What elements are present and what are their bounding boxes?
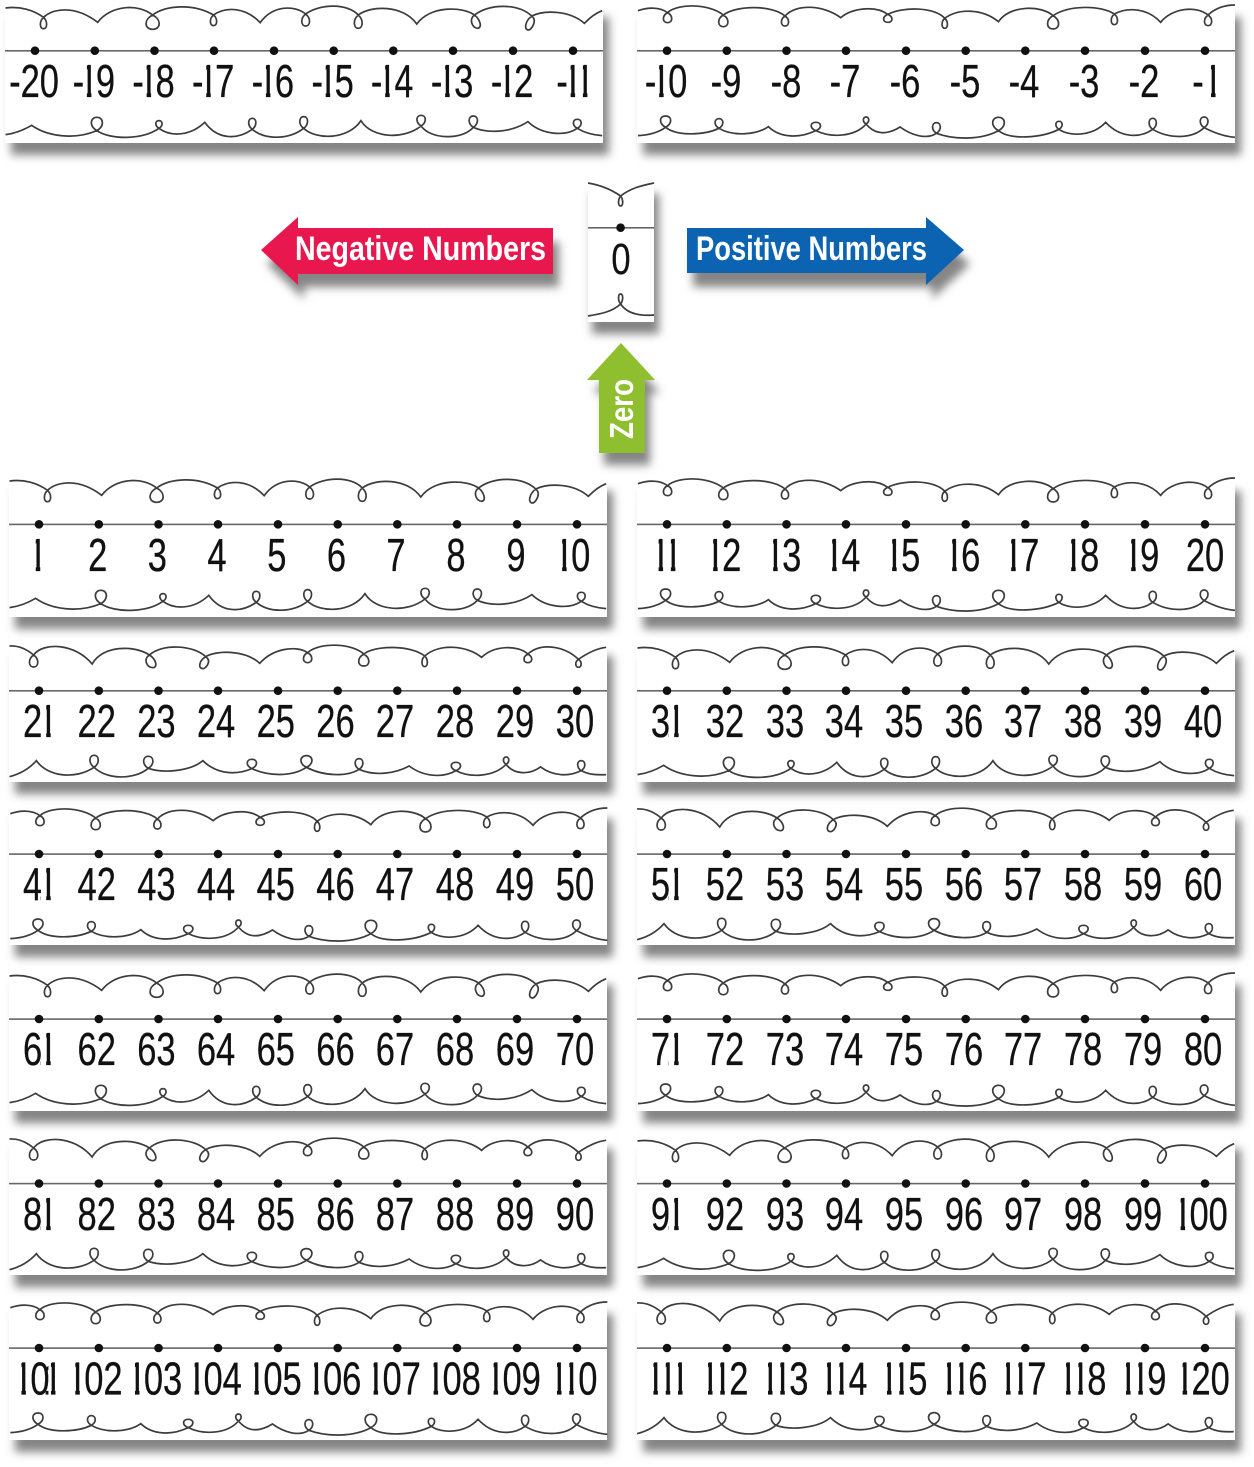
strip: -10 to -1: -8 (771, 55, 801, 107)
label: positive numbers: Positive Numbers (696, 230, 927, 268)
strip: 21 to 30: 25 (257, 695, 295, 747)
strip: 111 to 120: 111 (646, 1353, 689, 1405)
strip: 1 to 10: 7 (386, 529, 406, 581)
strip: -20 to -11 (5, 5, 603, 143)
strip: 21 to 30: 21 (23, 695, 57, 747)
strip: 61 to 70: 66 (316, 1023, 355, 1075)
strip: 71 to 80: 77 (1004, 1023, 1042, 1075)
strip: 101 to 110 (9, 1302, 607, 1440)
strip: 81 to 90: 81 (23, 1188, 57, 1240)
strip: 61 to 70: 63 (137, 1023, 176, 1075)
strip: 11 to 20: 17 (1003, 529, 1039, 581)
strip: 71 to 80: 75 (885, 1023, 923, 1075)
strip: 21 to 30: 28 (436, 695, 474, 747)
strip: 41 to 50: 48 (436, 858, 474, 910)
strip: -20 to -11: -17 (192, 55, 234, 107)
strip: 91 to 100: 92 (706, 1188, 744, 1240)
strip: 101 to 110: 101 (14, 1353, 62, 1405)
strip: 71 to 80: 79 (1124, 1023, 1162, 1075)
arrow: zero (587, 343, 655, 453)
strip: 61 to 70: 68 (436, 1023, 474, 1075)
strip: -20 to -11: -16 (252, 55, 294, 107)
strip: 111 to 120: 119 (1118, 1353, 1166, 1405)
strip: -20 to -11: -19 (73, 55, 115, 107)
strip: 1 to 10: 3 (148, 529, 167, 581)
strip: 41 to 50: 45 (257, 858, 295, 910)
zero card line (588, 227, 654, 229)
label: zero: Zero (603, 379, 640, 439)
strip: -10 to -1: -2 (1129, 55, 1159, 107)
strip: -10 to -1: -5 (950, 55, 980, 107)
label: negative numbers: Negative Numbers (295, 230, 546, 268)
strip: 101 to 110: 106 (306, 1353, 361, 1405)
strip: 41 to 50: 46 (316, 858, 355, 910)
strip: 31 to 40: 32 (706, 695, 744, 747)
strip: 11 to 20: 16 (944, 529, 980, 581)
strip: 111 to 120: 118 (1058, 1353, 1106, 1405)
strip: 81 to 90: 85 (257, 1188, 295, 1240)
strip: 41 to 50: 49 (496, 858, 534, 910)
strip: 71 to 80: 76 (945, 1023, 983, 1075)
strip: 91 to 100: 97 (1004, 1188, 1042, 1240)
strip: 1 to 10: 1 (28, 529, 47, 581)
strip: 101 to 110: 108 (426, 1353, 481, 1405)
strip: 41 to 50 (9, 807, 607, 945)
strip: 91 to 100: 98 (1064, 1188, 1102, 1240)
strip: 41 to 50: 50 (556, 858, 594, 910)
number 0: 0 (611, 235, 631, 284)
strip: -20 to -11: -12 (491, 55, 533, 107)
strip: 61 to 70: 62 (78, 1023, 116, 1075)
strip: 1 to 10: 2 (88, 529, 107, 581)
strip: 61 to 70: 67 (376, 1023, 414, 1075)
strip: 1 to 10: 9 (506, 529, 526, 581)
strip: 21 to 30: 30 (556, 695, 594, 747)
strip: 11 to 20: 20 (1186, 529, 1224, 581)
strip: 91 to 100: 91 (651, 1188, 685, 1240)
strip: 31 to 40: 36 (945, 695, 983, 747)
strip: 111 to 120 (637, 1302, 1235, 1440)
strip: 51 to 60 (637, 807, 1235, 945)
strip: 11 to 20: 15 (884, 529, 920, 581)
strip: 91 to 100: 99 (1124, 1188, 1162, 1240)
strip: 1 to 10: 10 (554, 529, 590, 581)
strip: 81 to 90: 82 (78, 1188, 116, 1240)
strip: -10 to -1: -1 (1192, 55, 1222, 107)
strip: 61 to 70: 64 (197, 1023, 235, 1075)
strip: 21 to 30: 22 (78, 695, 116, 747)
strip: 111 to 120: 113 (760, 1353, 808, 1405)
strip: 101 to 110: 103 (127, 1353, 182, 1405)
strip: -10 to -1 (637, 5, 1235, 143)
strip: -10 to -1: -10 (645, 55, 687, 107)
strip: 11 to 20: 13 (765, 529, 801, 581)
strip: 31 to 40: 34 (825, 695, 863, 747)
strip: 51 to 60: 57 (1004, 858, 1042, 910)
strip: 11 to 20: 19 (1123, 529, 1159, 581)
strip: 51 to 60: 53 (766, 858, 804, 910)
strip: 41 to 50: 42 (78, 858, 116, 910)
strip: 21 to 30: 24 (197, 695, 235, 747)
strip: -10 to -1: -9 (711, 55, 741, 107)
strip: 61 to 70: 69 (496, 1023, 534, 1075)
strip: 81 to 90: 88 (436, 1188, 474, 1240)
strip: 91 to 100 (637, 1137, 1235, 1275)
strip: 111 to 120: 116 (939, 1353, 987, 1405)
strip: 31 to 40 (637, 644, 1235, 782)
strip: 1 to 10 (9, 479, 607, 617)
strip: 31 to 40: 33 (766, 695, 804, 747)
strip: 101 to 110: 110 (549, 1353, 597, 1405)
strip: 91 to 100: 100 (1173, 1188, 1228, 1240)
strip: -10 to -1: -3 (1069, 55, 1099, 107)
strip: 51 to 60: 60 (1184, 858, 1222, 910)
strip: 61 to 70: 70 (556, 1023, 594, 1075)
strip: 81 to 90: 84 (197, 1188, 235, 1240)
strip: 81 to 90: 86 (316, 1188, 355, 1240)
strip: 101 to 110: 105 (247, 1353, 302, 1405)
strip: 11 to 20 (637, 478, 1235, 617)
strip: -20 to -11: -20 (9, 55, 59, 107)
strip: 91 to 100: 95 (885, 1188, 923, 1240)
strip: 111 to 120: 115 (879, 1353, 927, 1405)
strip: 41 to 50: 41 (23, 858, 57, 910)
strip: 71 to 80: 71 (651, 1023, 685, 1075)
strip: 81 to 90: 87 (376, 1188, 414, 1240)
strip: 71 to 80: 72 (706, 1023, 744, 1075)
strip: 51 to 60: 58 (1064, 858, 1102, 910)
strip: 31 to 40: 39 (1124, 695, 1162, 747)
strip: 111 to 120: 120 (1175, 1353, 1230, 1405)
strip: 31 to 40: 35 (885, 695, 923, 747)
strip: 11 to 20: 14 (824, 529, 860, 581)
strip: 71 to 80 (637, 973, 1235, 1111)
strip: 111 to 120: 112 (700, 1353, 748, 1405)
zero card scallops (588, 183, 654, 316)
strip: 31 to 40: 37 (1004, 695, 1042, 747)
strip: -10 to -1: -4 (1009, 55, 1039, 107)
strip: 21 to 30: 26 (316, 695, 355, 747)
strip: 21 to 30: 23 (137, 695, 176, 747)
zero card dot (616, 223, 625, 232)
strip: 71 to 80: 80 (1184, 1023, 1222, 1075)
strip: 81 to 90: 83 (137, 1188, 176, 1240)
strip: -20 to -11: -14 (371, 55, 413, 107)
strip: 81 to 90: 90 (556, 1188, 594, 1240)
strip: 41 to 50: 44 (197, 858, 235, 910)
strip: 51 to 60: 51 (651, 858, 685, 910)
strip: 31 to 40: 40 (1184, 695, 1222, 747)
strip: 1 to 10: 4 (207, 529, 227, 581)
strip: -20 to -11: -11 (556, 55, 594, 107)
strip: 51 to 60: 52 (706, 858, 744, 910)
strip: 111 to 120: 114 (819, 1353, 867, 1405)
strip: 21 to 30: 29 (496, 695, 534, 747)
strip: 61 to 70: 65 (257, 1023, 295, 1075)
strip: 91 to 100: 93 (766, 1188, 804, 1240)
strip: 41 to 50: 43 (137, 858, 176, 910)
strip: 51 to 60: 59 (1124, 858, 1162, 910)
strip: 31 to 40: 31 (651, 695, 685, 747)
strip: 71 to 80: 78 (1064, 1023, 1102, 1075)
strip: 11 to 20: 12 (705, 529, 741, 581)
strip: 51 to 60: 55 (885, 858, 923, 910)
arrow: positive numbers (687, 217, 964, 285)
strip: 101 to 110: 104 (187, 1353, 242, 1405)
strip: -10 to -1: -7 (830, 55, 860, 107)
strip: 21 to 30: 27 (376, 695, 414, 747)
strip: 1 to 10: 5 (267, 529, 286, 581)
strip: 71 to 80: 73 (766, 1023, 804, 1075)
zero card (588, 183, 654, 322)
strip: 61 to 70: 61 (23, 1023, 57, 1075)
strip: 1 to 10: 6 (327, 529, 346, 581)
strip: 101 to 110: 107 (366, 1353, 421, 1405)
strip: 51 to 60: 54 (825, 858, 863, 910)
strip: 31 to 40: 38 (1064, 695, 1102, 747)
strip: 101 to 110: 102 (67, 1353, 123, 1405)
strip: -20 to -11: -13 (431, 55, 473, 107)
strip: 91 to 100: 94 (825, 1188, 863, 1240)
strip: 81 to 90: 89 (496, 1188, 534, 1240)
strip: 11 to 20: 18 (1063, 529, 1099, 581)
strip: -20 to -11: -15 (311, 55, 354, 107)
strip: 41 to 50: 47 (376, 858, 414, 910)
strip: 71 to 80: 74 (825, 1023, 863, 1075)
arrow: negative numbers (261, 217, 553, 285)
strip: 61 to 70 (9, 973, 607, 1111)
strip: 51 to 60: 56 (945, 858, 983, 910)
strip: 111 to 120: 117 (998, 1353, 1046, 1405)
strip: -10 to -1: -6 (890, 55, 920, 107)
strip: 101 to 110: 109 (486, 1353, 541, 1405)
strip: 91 to 100: 96 (945, 1188, 983, 1240)
strip: -20 to -11: -18 (132, 55, 175, 107)
strip: 81 to 90 (9, 1137, 607, 1275)
strip: 1 to 10: 8 (446, 529, 466, 581)
strip: 21 to 30 (9, 644, 607, 782)
strip: 11 to 20: 11 (651, 529, 682, 581)
